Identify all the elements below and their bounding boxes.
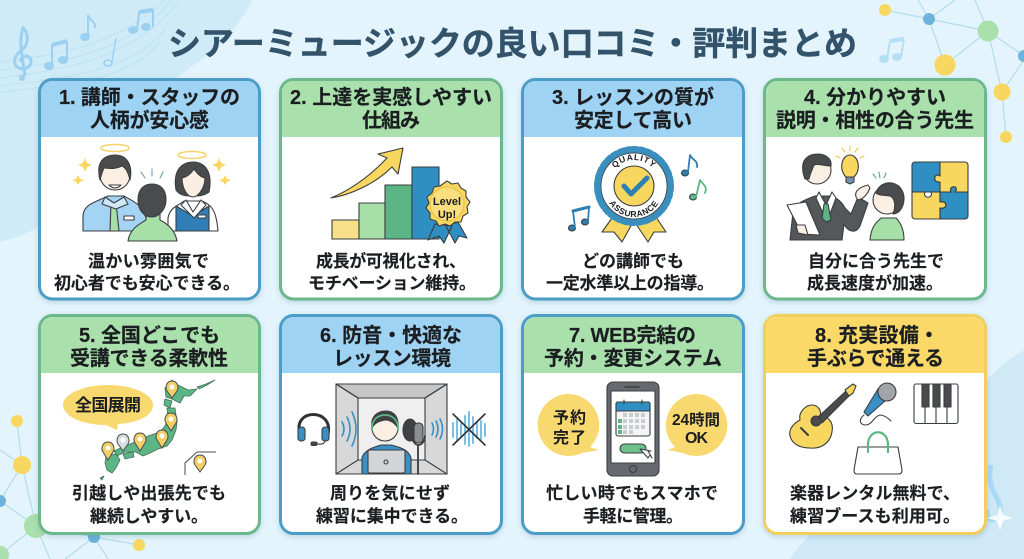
panel: card 7 [522, 316, 744, 534]
card 1 header [41, 81, 258, 137]
card 7 text: 手軽に管理。 [583, 506, 683, 526]
card 7 header: 7. WEB完結の [569, 324, 696, 347]
card 5 text: 引越しや出張先でも [72, 484, 226, 503]
card 8 text: 練習ブースも利用可。 [790, 506, 960, 526]
card 5 text [72, 484, 226, 526]
card 4 header: 4. 分かりやすい [804, 86, 946, 109]
decoration: network bottom left [0, 415, 145, 559]
card 4 text: 自分に合う先生で [808, 251, 944, 271]
icon: tote bag [854, 432, 902, 474]
callout: nationwide [63, 385, 153, 430]
icon: rising bar chart with level up badge: Level [433, 196, 461, 208]
card 8 header: 8. 充実設備・ [815, 324, 939, 347]
icon: quality assurance badge with notes: ASSURANCE [609, 200, 658, 217]
card 1 header: 人柄が安心感 [90, 108, 209, 132]
card 4 text [807, 251, 944, 293]
icon: rising bar chart with level up badge [331, 148, 470, 243]
card 3 header: 安定して高い [574, 109, 692, 132]
card 7 text: 忙しい時でもスマホで [546, 484, 718, 503]
card 6 header: 6. 防音・快適な [320, 324, 462, 347]
callout: 24 hours OK: 24時間 [672, 411, 720, 429]
card 2 header [282, 81, 500, 137]
callout: reservation complete [538, 394, 599, 456]
card 6 text: 周りを気にせず [330, 484, 450, 503]
decoration: network top right [879, 0, 1024, 143]
icon: teacher explaining to student with puzzle [787, 146, 968, 240]
card 4 header [766, 81, 984, 137]
card 2 text [308, 251, 476, 293]
callout: 24 hours OK [666, 394, 727, 456]
card 6 text: 練習に集中できる。 [316, 507, 468, 526]
decoration: faint shape bottom right [987, 465, 1000, 520]
panel: card 8 [764, 316, 986, 534]
card 5 header: 5. 全国どこでも [79, 324, 220, 347]
callout: reservation complete: 完了 [553, 429, 586, 447]
card 2 header: 2. 上達を実感しやすい [290, 85, 492, 109]
icon: quality assurance badge with notes: QUALITY [612, 154, 656, 167]
icon: friendly staff and student [72, 144, 231, 241]
decoration: sparkle [987, 505, 1013, 531]
icon: piano keys [914, 384, 958, 424]
title: シアーミュージックの良い口コミ・評判まとめ [168, 25, 857, 62]
card 5 text: 継続しやすい。 [90, 507, 208, 526]
card 1 text: 温かい雰囲気で [88, 252, 209, 271]
card 6 text [316, 484, 468, 526]
card 2 text: モチベーション維持。 [308, 274, 476, 293]
card 4 text: 成長速度が加速。 [807, 273, 943, 293]
card 7 text [546, 484, 718, 526]
panel: card 3 [519, 78, 747, 304]
card 6 header [282, 317, 500, 373]
card 3 text: どの講師でも [582, 252, 684, 271]
callout: nationwide: 全国展開 [75, 396, 141, 415]
card 3 text [546, 252, 714, 293]
panel: card 4 [764, 80, 986, 299]
panel: card 5 [40, 316, 260, 534]
card 3 text: 一定水準以上の指導。 [546, 273, 714, 293]
panel: card 1 [40, 80, 260, 299]
card 3 header: 3. レッスンの質が [552, 85, 714, 109]
card 5 header: 受講できる柔軟性 [70, 347, 228, 370]
icon: Japan map with pins [100, 380, 216, 480]
card 2 header: 仕組み [362, 109, 420, 132]
card 7 header: 予約・変更システム [544, 347, 722, 370]
card 5 header [41, 317, 258, 373]
panel: card 6 [280, 316, 502, 534]
card 8 text: 楽器レンタル無料で、 [790, 484, 960, 503]
icon: soundproof booth [298, 384, 485, 474]
card 2 text: 成長が可視化され、 [316, 251, 466, 271]
decoration: note near title [880, 39, 904, 62]
card 8 header: 手ぶらで通える [807, 347, 944, 370]
card 8 text [790, 484, 960, 526]
card 4 header: 説明・相性の合う先生 [776, 109, 974, 132]
card 7 header [524, 317, 742, 373]
icon: microphone [860, 383, 896, 425]
icon: smartphone with calendar [607, 382, 659, 476]
card 8 header [766, 317, 984, 373]
panel: card 2 [280, 80, 502, 299]
card 1 text [54, 252, 240, 293]
icon: quality assurance badge with notes [568, 146, 707, 243]
icon: rising bar chart with level up badge: Up! [438, 209, 456, 221]
card 3 header [524, 81, 742, 137]
card 1 header: 1. 講師・スタッフの [59, 86, 240, 109]
decoration: music staff and notes [0, 0, 180, 92]
card 1 text: 初心者でも安心できる。 [54, 274, 240, 293]
callout: 24 hours OK: OK [685, 430, 708, 447]
callout: reservation complete: 予約 [553, 409, 586, 427]
card 6 header: レッスン環境 [333, 347, 451, 370]
icon: guitar [790, 384, 856, 448]
